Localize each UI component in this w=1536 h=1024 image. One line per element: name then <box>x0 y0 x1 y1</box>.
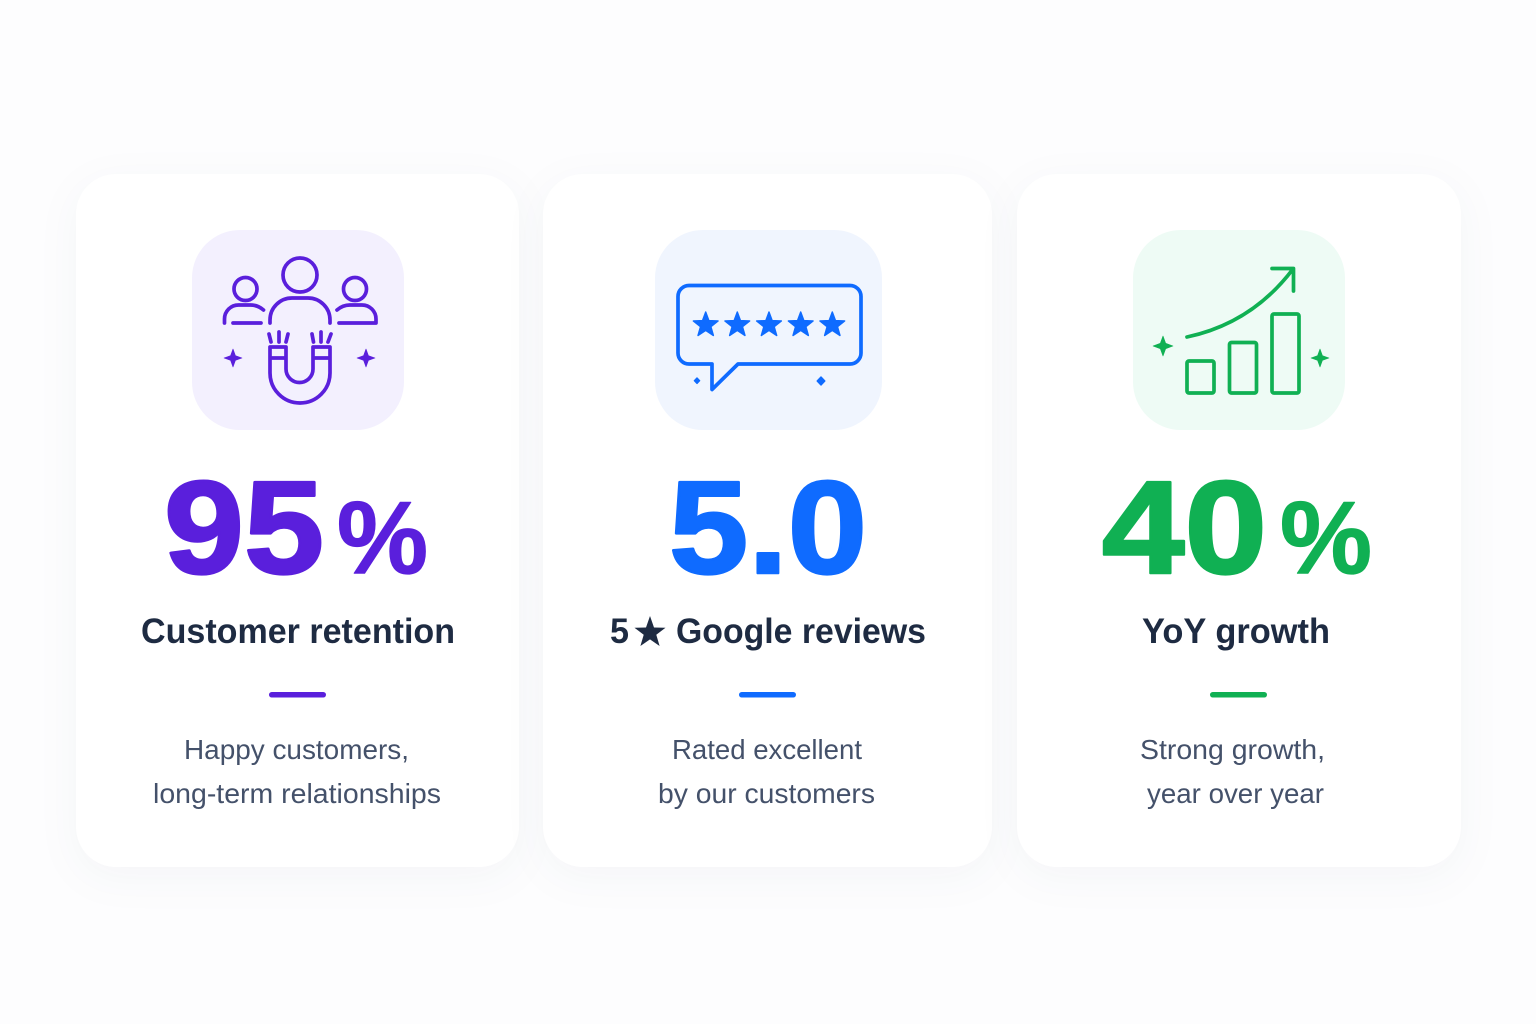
description <box>658 734 875 809</box>
description: by our customers <box>658 778 875 809</box>
icon: customers and magnet <box>192 230 404 430</box>
divider <box>1210 692 1267 698</box>
panel: google reviews <box>543 174 992 867</box>
divider <box>269 692 326 698</box>
metric: 40%: % <box>1280 480 1372 595</box>
description: Happy customers, <box>184 734 409 765</box>
heading: Customer retention <box>141 612 455 651</box>
metric: 95%: 95 <box>164 454 324 601</box>
metric: 40%: 40 <box>1102 454 1267 601</box>
description: long-term relationships <box>153 778 441 809</box>
panel: yoy growth <box>1017 174 1461 867</box>
description: year over year <box>1147 778 1324 809</box>
description <box>153 734 441 809</box>
description: Strong growth, <box>1140 734 1325 765</box>
icon: growth chart <box>1133 230 1345 430</box>
description: Rated excellent <box>672 734 862 765</box>
icon: heading star <box>634 616 666 646</box>
heading: 5 <box>610 612 629 651</box>
metric: 40% <box>1102 454 1372 601</box>
metric: 5.0: 5.0 <box>669 454 867 601</box>
divider <box>739 692 796 698</box>
heading: YoY growth <box>1142 612 1330 651</box>
heading: Google reviews <box>676 612 926 651</box>
metric: 95%: % <box>337 480 428 595</box>
icon: review bubble with stars <box>655 230 882 430</box>
metric: 95% <box>164 454 428 601</box>
description <box>1140 734 1325 809</box>
panel: customer retention <box>76 174 519 867</box>
